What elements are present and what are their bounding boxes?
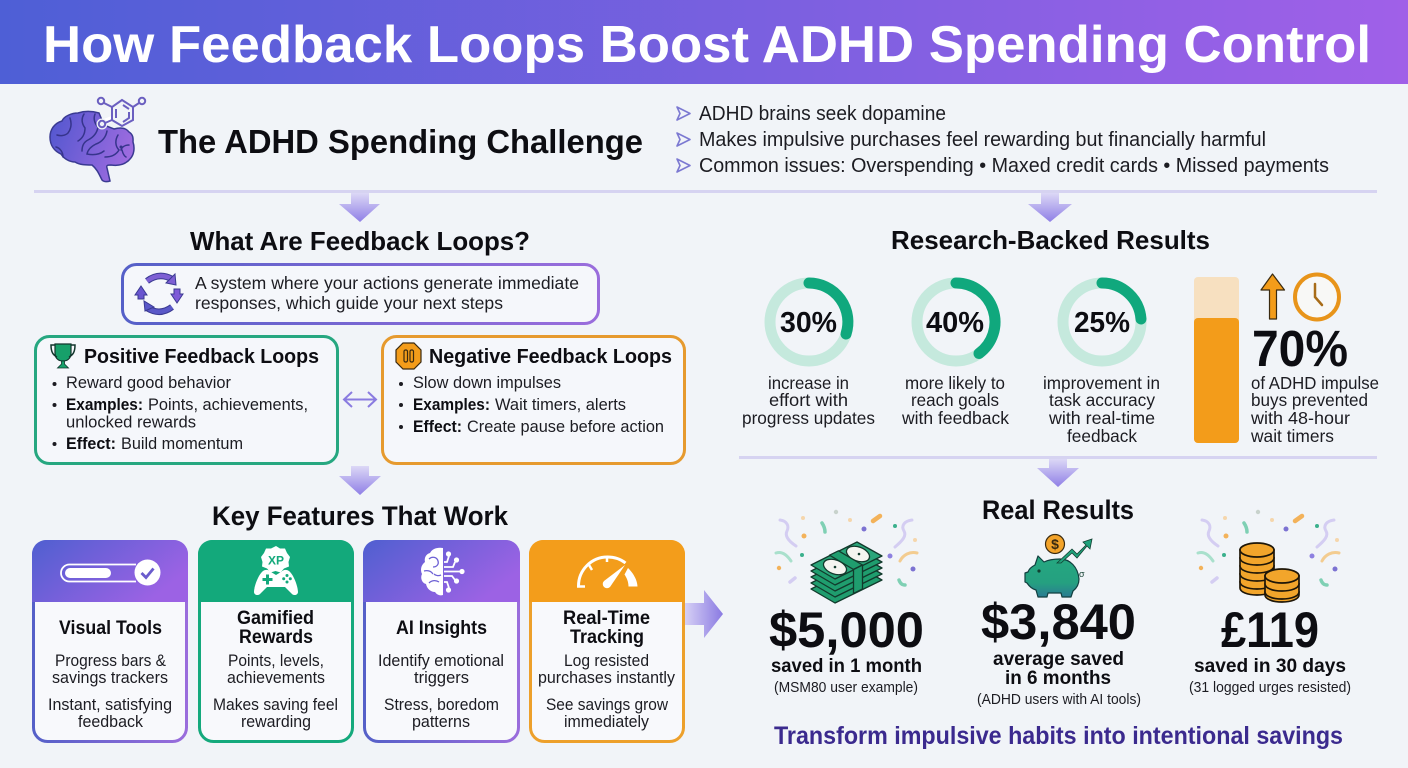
panel: negative feedback loops: Effect:: [413, 418, 462, 436]
card: gamified rewards: Gamified: [237, 608, 314, 629]
card: visual tools: Instant, satisfying: [48, 696, 172, 714]
heading: Key Features That Work: Key Features That Work: [212, 501, 509, 531]
stat ring: 25 percent: [1043, 283, 1160, 446]
card: AI insights: Identify emotional: [378, 652, 504, 670]
card: visual tools: feedback: [78, 713, 144, 731]
definition box: [122, 264, 598, 324]
icon: AI brain circuit: [421, 548, 465, 595]
icon: piggy bank with coin and growth arrow: [1025, 534, 1092, 597]
panel: negative feedback loops: Examples:: [413, 396, 490, 414]
card: real-time tracking: purchases instantly: [538, 669, 676, 687]
stat ring: 25 percent: improvement in: [1043, 373, 1160, 393]
section: real results: $5,000: [769, 602, 924, 658]
title banner: [0, 0, 1408, 84]
heading: What Are Feedback Loops: What Are Feedback Loops?: [190, 226, 530, 256]
section: real results: average saved: [993, 649, 1124, 670]
arrow: right to real results: [685, 590, 723, 638]
panel: positive feedback loops: Examples:: [66, 396, 143, 414]
section: what are feedback loops: [36, 226, 684, 464]
card: gamified rewards: rewarding: [241, 713, 311, 731]
card: AI insights: patterns: [412, 713, 470, 731]
card: real-time tracking: Real-Time: [563, 608, 650, 629]
panel: negative feedback loops: Slow down impulses: [413, 374, 561, 392]
section: real results: saved in 1 month: [771, 656, 922, 677]
section: key features: [32, 501, 685, 742]
section: real results: (MSM80 user example): [774, 680, 918, 696]
challenge bullet list: [677, 103, 1329, 177]
challenge bullet list: Common issues: Overspending • Maxed credit cards • Missed payments: [699, 155, 1329, 177]
card: visual tools: savings trackers: [52, 669, 168, 687]
panel: negative feedback loops: Negative Feedback Loops: [429, 346, 672, 368]
card: real-time tracking: [529, 540, 685, 742]
panel: negative feedback loops: Wait timers, alerts: [495, 396, 626, 414]
stat ring: 25 percent: with real-time: [1048, 408, 1155, 428]
icon: up arrow: [1261, 274, 1284, 319]
panel: positive feedback loops: [36, 336, 338, 464]
card: gamified rewards: Rewards: [239, 627, 313, 648]
arrow: down to feedback loops: [339, 193, 380, 222]
card: gamified rewards: achievements: [227, 669, 325, 687]
section: real results: [769, 495, 1351, 750]
card: AI insights: [363, 540, 520, 742]
challenge bullet list: ADHD brains seek dopamine: [699, 103, 946, 125]
icon: game controller with XP badge: [254, 546, 298, 595]
icon: progress bar with check: [61, 560, 160, 586]
definition box: responses, which guide your next steps: [195, 293, 503, 313]
panel: positive feedback loops: Reward good behavior: [66, 374, 231, 392]
tagline: Transform impulsive habits into intentional savings: [774, 722, 1343, 750]
stat ring: 40 percent: 40%: [926, 307, 984, 339]
stat ring: 30 percent: progress updates: [742, 408, 875, 428]
arrow: down to key features: [339, 466, 381, 495]
icon: brain with dopamine molecule: [50, 98, 145, 182]
icon: game controller with XP badge: XP: [268, 554, 284, 568]
icon: stop sign pause: [396, 343, 421, 369]
card: gamified rewards: Points, levels,: [228, 652, 324, 670]
card: gamified rewards: Makes saving feel: [213, 696, 338, 714]
section: real results: (31 logged urges resisted): [1189, 680, 1351, 696]
section: the ADHD spending challenge: [50, 98, 1329, 182]
stat ring: 25 percent: feedback: [1067, 426, 1137, 446]
stat: 70 percent bar: 70%: [1252, 320, 1348, 377]
section: real results: saved in 30 days: [1194, 656, 1346, 677]
card: real-time tracking: Tracking: [570, 627, 644, 648]
stat ring: 40 percent: [901, 283, 1009, 428]
section: real results: $3,840: [981, 594, 1136, 650]
card: real-time tracking: See savings grow: [546, 696, 668, 714]
stat: 70 percent bar: wait timers: [1250, 426, 1334, 446]
stat ring: 30 percent: increase in: [768, 373, 849, 393]
arrow: down to real results: [1037, 459, 1079, 487]
panel: positive feedback loops: Positive Feedback Loops: [84, 346, 319, 368]
panel: positive feedback loops: Effect:: [66, 435, 116, 453]
panel: positive feedback loops: Points, achievements,: [148, 396, 308, 414]
section: real results: (ADHD users with AI tools): [977, 692, 1141, 708]
stat ring: 40 percent: reach goals: [911, 390, 999, 410]
panel: negative feedback loops: [382, 336, 684, 464]
icon: coin stacks: [1240, 543, 1299, 602]
card: AI insights: AI Insights: [396, 618, 487, 639]
card: gamified rewards: [198, 540, 354, 742]
heading: Real Results: Real Results: [982, 495, 1134, 525]
stat ring: 40 percent: with feedback: [901, 408, 1009, 428]
heading: The ADHD Spending Challenge: The ADHD Spending Challenge: [158, 123, 643, 160]
card: visual tools: Visual Tools: [59, 618, 162, 639]
heading: Research-Backed Results: Research-Backed Results: [891, 225, 1210, 255]
stat ring: 25 percent: 25%: [1074, 307, 1130, 339]
confetti right: [1198, 510, 1339, 585]
card: real-time tracking: Log resisted: [564, 652, 649, 670]
icon: piggy bank with coin and growth arrow: σ: [1079, 569, 1085, 579]
card: real-time tracking: immediately: [564, 713, 650, 731]
icon: speedometer gauge: [577, 557, 638, 588]
section: real results: in 6 months: [1005, 668, 1111, 689]
icon: clock: [1295, 274, 1339, 320]
arrow: down to research results: [1028, 193, 1072, 222]
stat ring: 30 percent: [742, 283, 875, 428]
card: visual tools: [32, 540, 188, 742]
panel: positive feedback loops: Build momentum: [121, 435, 243, 453]
stat: 70 percent bar: of ADHD impulse: [1251, 373, 1379, 393]
panel: positive feedback loops: unlocked rewards: [66, 414, 196, 432]
stat ring: 25 percent: task accuracy: [1049, 390, 1155, 410]
icon: trophy: [51, 344, 75, 368]
definition box: A system where your actions generate immediate: [195, 273, 579, 293]
stat: 70 percent bar: [1194, 274, 1379, 446]
stat ring: 40 percent: more likely to: [905, 373, 1005, 393]
icon: stack of cash: [811, 542, 882, 603]
section: real results: £119: [1221, 602, 1319, 658]
stat ring: 30 percent: effort with: [769, 390, 848, 410]
icon: piggy bank with coin and growth arrow: $: [1051, 536, 1059, 552]
card: AI insights: Stress, boredom: [384, 696, 499, 714]
card: AI insights: triggers: [414, 669, 469, 687]
title banner: How Feedback Loops Boost ADHD Spending Control: [43, 16, 1371, 74]
stat ring: 30 percent: 30%: [780, 307, 837, 339]
section: research-backed results: [742, 225, 1379, 446]
challenge bullet list: Makes impulsive purchases feel rewarding but financially harmful: [699, 129, 1266, 151]
stat: 70 percent bar: buys prevented: [1251, 390, 1368, 410]
icon: cycle arrows: [135, 274, 183, 312]
stat: 70 percent bar: with 48-hour: [1250, 408, 1350, 428]
confetti left: [776, 510, 917, 585]
panel: negative feedback loops: Create pause before action: [467, 418, 664, 436]
card: visual tools: Progress bars &: [55, 652, 166, 670]
arrow: double headed between loops: [344, 392, 376, 407]
